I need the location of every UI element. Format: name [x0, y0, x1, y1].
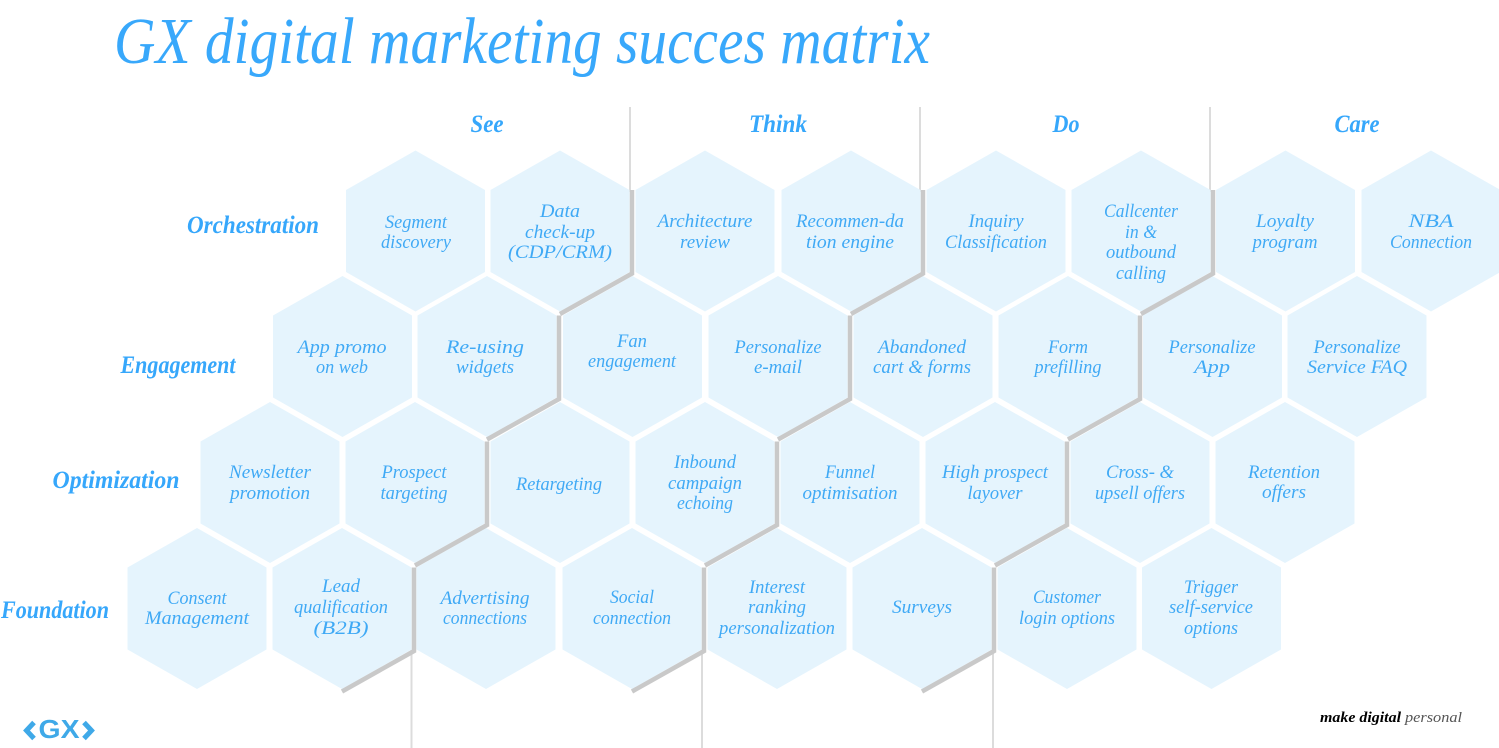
hexagon: Social connection: Social: [610, 587, 654, 608]
hexagon: Personalize e-mail: Personalize: [734, 337, 822, 358]
hexagon: Interest ranking personalization: personalization: [717, 618, 835, 639]
hexagon: Fan engagement: [563, 276, 702, 437]
hexagon: High prospect layover: layover: [968, 483, 1023, 504]
hexagon: Customer login options: [998, 528, 1136, 689]
staircase shadows separating phases: [342, 190, 1213, 692]
column divider lines: [412, 107, 1210, 748]
hexagon: Data check-up: Data: [539, 201, 580, 222]
hexagon: Inquiry Classification: [926, 150, 1066, 312]
hexagon: Social connection: connection: [593, 608, 671, 629]
hexagon: Recommendation engine: [782, 150, 920, 312]
hexagon: Personalize Service FAQ: Service FAQ: [1307, 357, 1407, 378]
hexagon: High prospect layover: High prospect: [941, 462, 1049, 483]
column headings: [470, 111, 1380, 138]
hexagon: Abandoned cart & forms: Abandoned: [876, 337, 967, 358]
hexagon: Inbound campaign echoing: campaign: [668, 473, 742, 494]
hexagon: Inquiry Classification: Classification: [945, 232, 1047, 253]
hexagon: Funnel optimisation: Funnel: [824, 462, 875, 483]
hexagon: Lead qualification (B2B): (B2B): [314, 618, 368, 639]
hexagon: Advertising connections: [416, 528, 556, 689]
row labels: Optimization: [52, 467, 180, 494]
hexagon: Retention offers: offers: [1262, 482, 1306, 503]
hexagon: Personalize App: [1143, 276, 1282, 437]
column headings: Care: [1334, 111, 1380, 138]
hexagon: Lead qualification (B2B): Lead: [321, 576, 360, 597]
row: Engagement: [273, 276, 1426, 437]
column headings: Think: [749, 111, 807, 138]
hexagon: Recommendation engine: tion engine: [806, 232, 894, 253]
hexagon: Customer login options: Customer: [1033, 587, 1102, 608]
hexagon: Funnel optimisation: optimisation: [802, 483, 898, 504]
hexagon: Retargeting: Retargeting: [515, 474, 602, 495]
hexagon: Architecture review: [636, 150, 774, 312]
hexagon: Cross- & upsell offers: [1070, 402, 1210, 563]
title: GX digital marketing succes matrix: [114, 5, 930, 78]
hexagon: Callcenter: outbound: [1106, 242, 1176, 263]
hexagon: Loyalty program: program: [1251, 232, 1318, 253]
hexagon: Architecture review: review: [680, 232, 730, 253]
row labels: [0, 212, 319, 624]
hexagon: Advertising connections: Advertising: [438, 588, 530, 609]
hexagon: App promo on web: [273, 276, 412, 437]
logo: GX: GX: [38, 714, 80, 744]
row: Optimization: [200, 402, 1354, 563]
row labels: Orchestration: [187, 212, 319, 239]
row labels: Engagement: [120, 352, 236, 379]
hexagon: Callcenter: [1072, 150, 1210, 312]
hexagon: Inbound campaign echoing: [636, 402, 774, 563]
hexagon: Inbound campaign echoing: Inbound: [673, 452, 736, 473]
hexagon: App promo on web: on web: [316, 357, 368, 378]
hexagon: Prospect targeting: [346, 402, 484, 563]
hexagon: Segment discovery: discovery: [381, 232, 452, 253]
hexagon: Data check-up: (CDP/CRM): [508, 242, 612, 263]
hexagon: Callcenter: in &: [1125, 222, 1157, 243]
hexagon: Newsletter promotion: [200, 402, 340, 563]
hexagon: Fan engagement: Fan: [616, 331, 647, 352]
hexagon: Personalize App: App: [1192, 357, 1230, 378]
hexagon: Prospect targeting: targeting: [380, 483, 448, 504]
hexagon: Personalize Service FAQ: Personalize: [1313, 337, 1400, 358]
hexagon: Interest ranking personalization: ranking: [748, 597, 806, 618]
hexagon: Form prefilling: Form: [1047, 337, 1088, 358]
hexagon: Data check-up: [490, 150, 630, 312]
hexagon: Personalize e-mail: [708, 276, 848, 437]
hexagon: Cross- & upsell offers: upsell offers: [1095, 483, 1185, 504]
hexagon: Inquiry Classification: Inquiry: [968, 211, 1024, 232]
hexagon: Segment discovery: Segment: [385, 212, 448, 233]
hexagon: Personalize Service FAQ: [1288, 276, 1426, 437]
hexagon: Architecture review: Architecture: [655, 211, 752, 232]
hexagon: Trigger self-service options: [1142, 528, 1281, 689]
hexagon: Interest ranking personalization: Interest: [748, 577, 806, 598]
hexagon: Lead qualification (B2B): qualification: [294, 597, 388, 618]
hexagon: Segment discovery: [346, 150, 485, 312]
hexagon: Personalize e-mail: e-mail: [754, 357, 802, 378]
hexagon: Trigger self-service options: options: [1184, 618, 1238, 639]
tagline: make digital: [1320, 710, 1402, 726]
hexagon: Fan engagement: engagement: [588, 351, 677, 372]
hexagon: Newsletter promotion: promotion: [228, 483, 310, 504]
hexagon: Retention offers: Retention: [1247, 462, 1320, 483]
hexagon: Re-using widgets: Re-using: [445, 337, 524, 358]
hexagon: Abandoned cart & forms: [854, 276, 992, 437]
hexagon: Re-using widgets: widgets: [456, 357, 514, 378]
hexagon: Funnel optimisation: [780, 402, 920, 563]
hexagon: Advertising connections: connections: [443, 608, 527, 629]
hexagon: Surveys: [852, 528, 992, 689]
hexagon: NBA Connection: NBA: [1407, 211, 1454, 232]
hexagon: Trigger self-service options: self-service: [1169, 597, 1253, 618]
hexagon: Interest ranking personalization: [708, 528, 846, 689]
hexagon: Re-using widgets: [418, 276, 556, 437]
hexagon: Form prefilling: [998, 276, 1138, 437]
hexagon: NBA Connection: [1362, 150, 1499, 312]
hexagon: Consent Management: [128, 528, 266, 689]
hexagon: Cross- & upsell offers: Cross- &: [1106, 462, 1174, 483]
hexagon: Data check-up: check-up: [525, 222, 595, 243]
tagline: [1320, 710, 1462, 726]
hexagon: NBA Connection: Connection: [1390, 232, 1472, 253]
row labels: Foundation: [0, 597, 109, 624]
hexagon: Social connection: [562, 528, 702, 689]
hexagon: Customer login options: login options: [1019, 608, 1115, 629]
hexagon: Consent Management: Management: [144, 608, 250, 629]
hexagon: High prospect layover: [926, 402, 1064, 563]
hexagon: Newsletter promotion: Newsletter: [228, 462, 312, 483]
hexagon: Retargeting: [490, 402, 630, 563]
column headings: See: [470, 111, 504, 138]
column headings: Do: [1052, 111, 1080, 138]
hexagon: Consent Management: Consent: [168, 588, 227, 609]
hexagon: Callcenter: calling: [1116, 263, 1166, 284]
hexagon: Loyalty program: [1216, 150, 1355, 312]
row: Foundation: [128, 528, 1281, 689]
row: Orchestration: [346, 150, 1499, 312]
hexagon: Surveys: Surveys: [892, 597, 952, 618]
hexagon: Abandoned cart & forms: cart & forms: [873, 357, 971, 378]
hexagon: Trigger self-service options: Trigger: [1184, 577, 1239, 598]
hexagon: Inbound campaign echoing: echoing: [677, 493, 733, 514]
hexagon: Form prefilling: prefilling: [1033, 357, 1102, 378]
hexagon: Callcenter: Callcenter: [1104, 201, 1179, 222]
hexagon: Prospect targeting: Prospect: [381, 462, 447, 483]
hexagon: Loyalty program: Loyalty: [1255, 211, 1315, 232]
hexagon: Lead qualification (B2B): [272, 528, 412, 689]
hexagon: Recommendation engine: Recommen-da: [795, 211, 904, 232]
hexagon: App promo on web: App promo: [295, 337, 386, 358]
hexagon: Retention offers: [1216, 402, 1354, 563]
hexagon: Personalize App: Personalize: [1168, 337, 1256, 358]
logo: GX: [26, 714, 92, 744]
tagline: personal: [1404, 710, 1462, 726]
